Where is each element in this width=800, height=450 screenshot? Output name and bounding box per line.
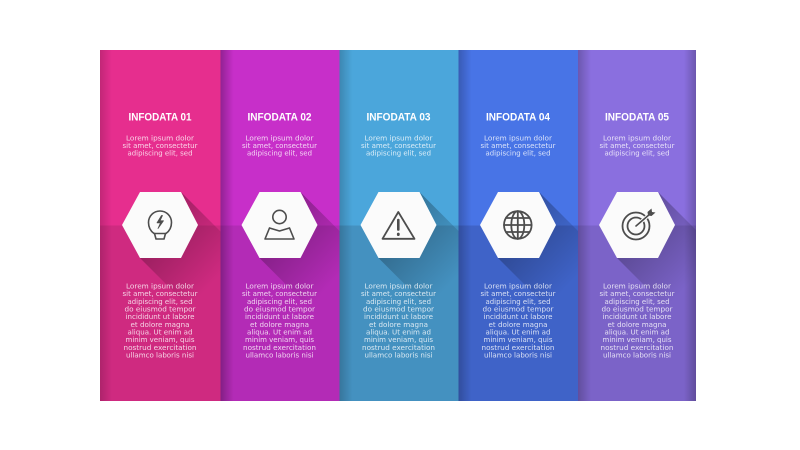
text block: body: incididunt ut labore xyxy=(364,313,433,321)
text block: body: adipiscing elit, sed xyxy=(128,298,192,306)
text block: body: minim veniam, quis xyxy=(602,336,672,344)
text block: body xyxy=(122,282,198,359)
text block: body: et dolore magna xyxy=(369,321,428,329)
text block: intro: sit amet, consectetur xyxy=(242,142,317,150)
text block: body: Lorem ipsum dolor xyxy=(126,282,194,290)
text block: body: adipiscing elit, sed xyxy=(486,298,550,306)
text block: body: ullamco laboris nisi xyxy=(126,351,194,359)
text block: body: Lorem ipsum dolor xyxy=(364,282,433,290)
text block: body xyxy=(242,282,317,359)
text block: intro: adipiscing elit, sed xyxy=(486,150,550,158)
text block: body xyxy=(600,282,675,359)
text block: body: do eiusmod tempor xyxy=(482,306,554,314)
heading: INFODATA 02 xyxy=(248,112,312,124)
text block: intro: adipiscing elit, sed xyxy=(247,150,312,158)
text block: body: nostrud exercitation xyxy=(243,344,316,352)
heading: INFODATA 04 xyxy=(486,112,550,124)
text block: body: adipiscing elit, sed xyxy=(604,298,670,306)
text block: body: sit amet, consectetur xyxy=(122,290,198,298)
text block: intro: Lorem ipsum dolor xyxy=(126,134,194,142)
text block: intro: Lorem ipsum dolor xyxy=(246,134,314,142)
text block: body xyxy=(361,282,436,359)
text block: body: incididunt ut labore xyxy=(126,313,194,321)
text block: intro xyxy=(361,134,436,158)
panel: infodata 05 xyxy=(578,50,696,401)
text block: body: do eiusmod tempor xyxy=(124,306,196,314)
text block: intro: adipiscing elit, sed xyxy=(128,150,192,158)
text block: body: aliqua. Ut enim ad xyxy=(247,328,312,336)
text block: body: incididunt ut labore xyxy=(484,313,552,321)
panel: infodata 01 xyxy=(100,50,220,401)
text block: body xyxy=(480,282,556,359)
text block: body: do eiusmod tempor xyxy=(244,306,315,314)
text block: body: ullamco laboris nisi xyxy=(484,351,552,359)
text block: body: Lorem ipsum dolor xyxy=(484,282,552,290)
text block: body: et dolore magna xyxy=(608,321,666,329)
text block: body: nostrud exercitation xyxy=(124,344,196,352)
heading: INFODATA 05 xyxy=(605,112,669,124)
text block: body: ullamco laboris nisi xyxy=(364,351,433,359)
hexagon xyxy=(242,192,318,258)
hexagon xyxy=(599,192,675,258)
panel: infodata 02 xyxy=(220,50,340,401)
text block: intro: Lorem ipsum dolor xyxy=(364,134,433,142)
text block: body: aliqua. Ut enim ad xyxy=(486,328,550,336)
text block: intro: sit amet, consectetur xyxy=(480,142,556,150)
text block: body: minim veniam, quis xyxy=(484,336,553,344)
text block: body: minim veniam, quis xyxy=(126,336,195,344)
icon: warning triangle xyxy=(382,212,414,239)
heading: INFODATA 01 xyxy=(128,112,192,124)
text block: intro: sit amet, consectetur xyxy=(122,142,198,150)
icon: target with arrow xyxy=(622,208,656,240)
text block: body: et dolore magna xyxy=(488,321,548,329)
text block: body: aliqua. Ut enim ad xyxy=(128,328,192,336)
text block: body: adipiscing elit, sed xyxy=(247,298,312,306)
text block: body: Lorem ipsum dolor xyxy=(246,282,314,290)
icon: person on map xyxy=(265,210,294,239)
text block: body: nostrud exercitation xyxy=(362,344,435,352)
hexagon xyxy=(480,192,556,258)
icon: light bulb xyxy=(148,211,172,239)
text block: body: aliqua. Ut enim ad xyxy=(604,328,670,336)
text block: body: incididunt ut labore xyxy=(245,313,314,321)
hexagon xyxy=(360,192,436,258)
text block: intro: Lorem ipsum dolor xyxy=(603,134,671,142)
text block: body: et dolore magna xyxy=(130,321,190,329)
text block: body: et dolore magna xyxy=(250,321,309,329)
panel: infodata 03 xyxy=(340,50,458,401)
text block: intro xyxy=(242,134,317,158)
hexagon xyxy=(122,192,198,258)
text block: body: minim veniam, quis xyxy=(364,336,433,344)
text block: intro: adipiscing elit, sed xyxy=(604,150,670,158)
text block: intro xyxy=(600,134,675,158)
text block: intro: adipiscing elit, sed xyxy=(366,150,431,158)
text block: intro xyxy=(480,134,556,158)
text block: body: ullamco laboris nisi xyxy=(246,351,314,359)
text block: intro: sit amet, consectetur xyxy=(361,142,436,150)
panel: infodata 04 xyxy=(458,50,578,401)
text block: intro: sit amet, consectetur xyxy=(600,142,675,150)
heading: INFODATA 03 xyxy=(366,112,430,124)
icon: globe xyxy=(504,211,532,239)
text block: intro xyxy=(122,134,198,158)
text block: body: incididunt ut labore xyxy=(602,313,672,321)
text block: body: Lorem ipsum dolor xyxy=(603,282,671,290)
text block: body: aliqua. Ut enim ad xyxy=(366,328,431,336)
text block: body: sit amet, consectetur xyxy=(480,290,556,298)
text block: body: do eiusmod tempor xyxy=(602,306,673,314)
text block: body: sit amet, consectetur xyxy=(242,290,317,298)
text block: body: nostrud exercitation xyxy=(482,344,554,352)
text block: body: ullamco laboris nisi xyxy=(603,351,671,359)
text block: body: do eiusmod tempor xyxy=(363,306,434,314)
text block: body: minim veniam, quis xyxy=(245,336,314,344)
text block: body: sit amet, consectetur xyxy=(600,290,675,298)
text block: intro: Lorem ipsum dolor xyxy=(484,134,552,142)
text block: body: sit amet, consectetur xyxy=(361,290,436,298)
text block: body: nostrud exercitation xyxy=(600,344,674,352)
infographic xyxy=(100,50,696,401)
text block: body: adipiscing elit, sed xyxy=(366,298,431,306)
